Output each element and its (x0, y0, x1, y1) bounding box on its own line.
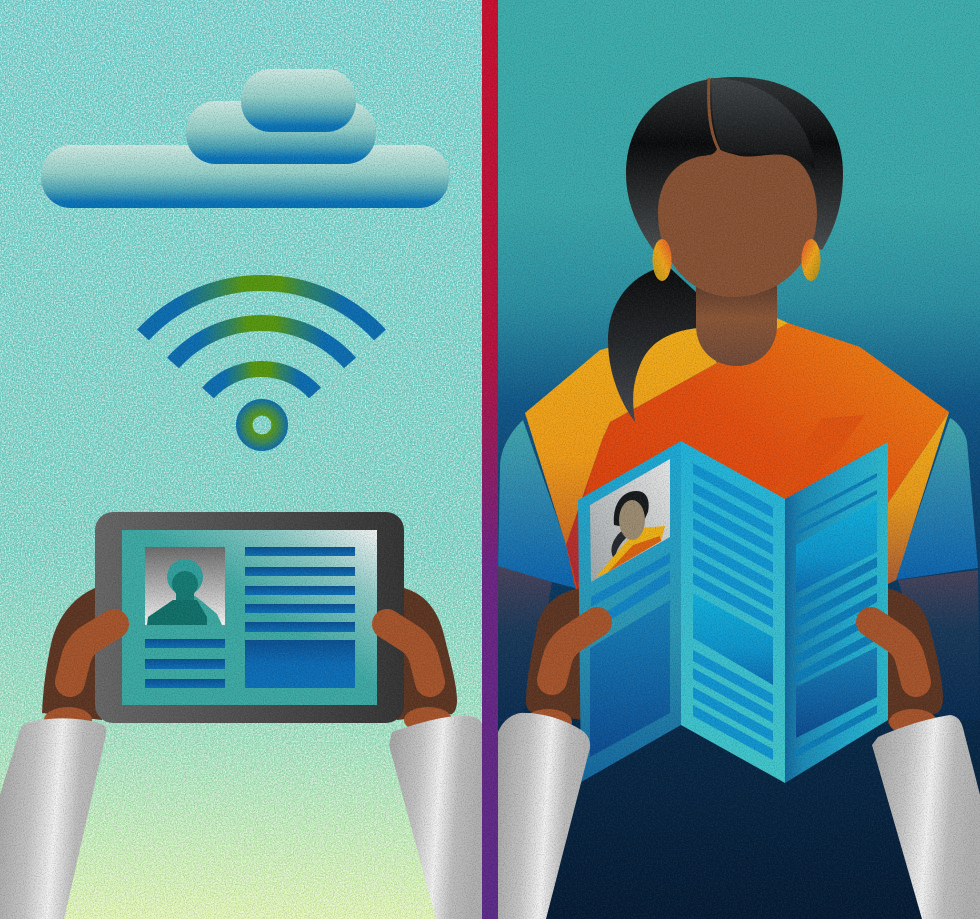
right sleeve: tablet (389, 716, 482, 919)
panel: left background (0, 0, 482, 919)
right thumb: tablet (387, 624, 430, 682)
left panel (578, 441, 681, 782)
left hand back: brochure (526, 588, 582, 720)
sari orange body (566, 323, 949, 610)
sari yellow top (777, 318, 788, 329)
brochure portrait (590, 459, 670, 582)
right earring (802, 239, 820, 281)
centre lines (693, 463, 773, 760)
hair part (709, 78, 719, 150)
brochure (578, 441, 888, 783)
panel: left background grain (0, 0, 482, 919)
sari facet (772, 415, 865, 498)
record blue block (245, 640, 355, 688)
left wrist: tablet (44, 707, 92, 733)
center divider bar (482, 0, 498, 919)
sari lower left edge (566, 420, 605, 590)
panel: right background (498, 0, 980, 919)
right hand back: tablet (397, 588, 457, 720)
sari yellow right (888, 412, 949, 584)
icon: wifi signal (143, 283, 380, 443)
ponytail (608, 268, 697, 422)
tablet (95, 512, 404, 723)
icon: cloud (41, 69, 449, 208)
left arm shade (498, 566, 552, 735)
left panel blue block (590, 600, 670, 757)
left panel lines (591, 553, 670, 632)
centre blue block (693, 593, 773, 685)
profile photo (145, 547, 225, 625)
left wrist: brochure (524, 709, 572, 735)
hair right section highlight (711, 78, 815, 170)
sari yellow left (525, 328, 717, 545)
right hand back: brochure (886, 588, 943, 724)
record text lines (145, 547, 355, 688)
tablet screen (122, 530, 377, 705)
left thumb: brochure (552, 622, 597, 680)
left sleeve: brochure (498, 713, 590, 919)
right panel lower block (796, 647, 877, 738)
left thumb: tablet (70, 624, 114, 682)
hair (626, 77, 843, 252)
right arm shade (898, 570, 980, 720)
tablet body (95, 512, 404, 723)
right panel lines (796, 473, 877, 757)
right sleeve (895, 418, 978, 580)
right sleeve: brochure (872, 715, 980, 919)
right panel upper block (796, 500, 877, 593)
left earring (652, 239, 672, 281)
left sleeve (498, 420, 578, 588)
woman figure (498, 77, 980, 735)
right panel (785, 442, 888, 783)
left sleeve: tablet (0, 718, 106, 919)
right wrist: tablet (404, 707, 452, 733)
face (658, 148, 817, 297)
right thumb: brochure (871, 622, 916, 682)
centre panel (681, 441, 785, 783)
neck (696, 270, 777, 366)
left hand back: tablet (42, 588, 102, 720)
right wrist: brochure (889, 709, 937, 735)
